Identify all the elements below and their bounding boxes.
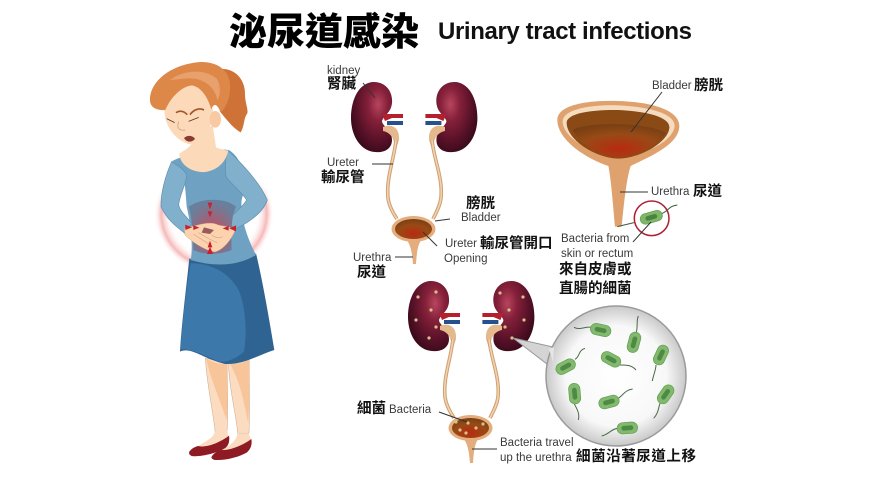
magnified bacteria lens — [513, 306, 686, 446]
title — [229, 11, 692, 54]
right sleeve — [225, 151, 267, 229]
hands — [184, 223, 235, 252]
diagram: large bladder with bacteria — [557, 101, 679, 236]
labels: large bladder: Bacteria from — [561, 233, 629, 245]
feet — [198, 430, 251, 450]
labels: healthy urinary tract: Bladder — [461, 212, 501, 224]
hair highlight — [170, 72, 220, 100]
infected kidney left — [408, 281, 460, 351]
labels: large bladder: 膀胱 — [694, 76, 723, 94]
labels: healthy urinary tract: Opening — [444, 253, 487, 265]
bladder body — [557, 101, 679, 227]
left sleeve — [161, 162, 192, 233]
bacterium in red circle — [617, 201, 677, 236]
labels: healthy urinary tract: Ureter — [327, 157, 359, 169]
belly pain — [189, 200, 236, 254]
labels: large bladder — [559, 76, 723, 297]
labels: healthy urinary tract — [321, 65, 552, 281]
title: 泌尿道感染 — [229, 11, 419, 54]
illustration: woman with abdominal pain — [150, 62, 274, 460]
ureters and bladder — [440, 325, 502, 463]
labels: infected tract — [357, 400, 696, 465]
ponytail — [218, 69, 248, 132]
labels: large bladder: 來自皮膚或 — [559, 260, 632, 278]
labels: healthy urinary tract: 尿道 — [357, 264, 386, 281]
labels: large bladder: 直腸的細菌 — [559, 279, 632, 297]
labels: infected tract: Bacteria — [389, 404, 432, 416]
red arrows — [185, 203, 236, 254]
kidney left — [351, 82, 403, 152]
labels: infected tract: up the urethra — [500, 452, 572, 464]
pain glow — [156, 184, 272, 265]
labels: healthy urinary tract: 膀胱 — [466, 194, 495, 212]
labels: healthy urinary tract: Ureter — [445, 238, 477, 250]
ureters and bladder — [383, 126, 445, 264]
legs — [205, 358, 250, 433]
face — [165, 85, 221, 144]
labels: healthy urinary tract: 輸尿管開口 — [480, 234, 552, 252]
labels: large bladder: skin or rectum — [561, 248, 633, 260]
neck and chest — [179, 125, 228, 172]
infected kidney right — [482, 281, 534, 351]
hair — [150, 62, 230, 113]
labels: infected tract: 細菌沿著尿道上移 — [576, 448, 696, 465]
skirt — [180, 253, 274, 364]
bacteria specks — [414, 290, 526, 435]
labels: healthy urinary tract: kidney — [327, 65, 360, 77]
labels: healthy urinary tract: 輸尿管 — [321, 168, 364, 186]
diagram: infected urinary tract — [408, 281, 534, 463]
kidney right — [425, 82, 477, 152]
labels: large bladder: 尿道 — [693, 183, 722, 200]
labels: large bladder: Bladder — [652, 80, 692, 92]
labels: healthy urinary tract: 腎臟 — [327, 74, 356, 92]
sweater body — [172, 150, 256, 264]
shoes — [189, 436, 252, 460]
title: Urinary tract infections — [438, 18, 692, 45]
labels: infected tract: 細菌 — [357, 400, 386, 417]
labels: large bladder: Urethra — [651, 186, 690, 198]
labels: healthy urinary tract: Urethra — [353, 252, 392, 264]
bacteria — [574, 316, 660, 436]
diagram: healthy urinary tract — [351, 82, 477, 264]
labels: infected tract: Bacteria travel — [500, 437, 574, 449]
